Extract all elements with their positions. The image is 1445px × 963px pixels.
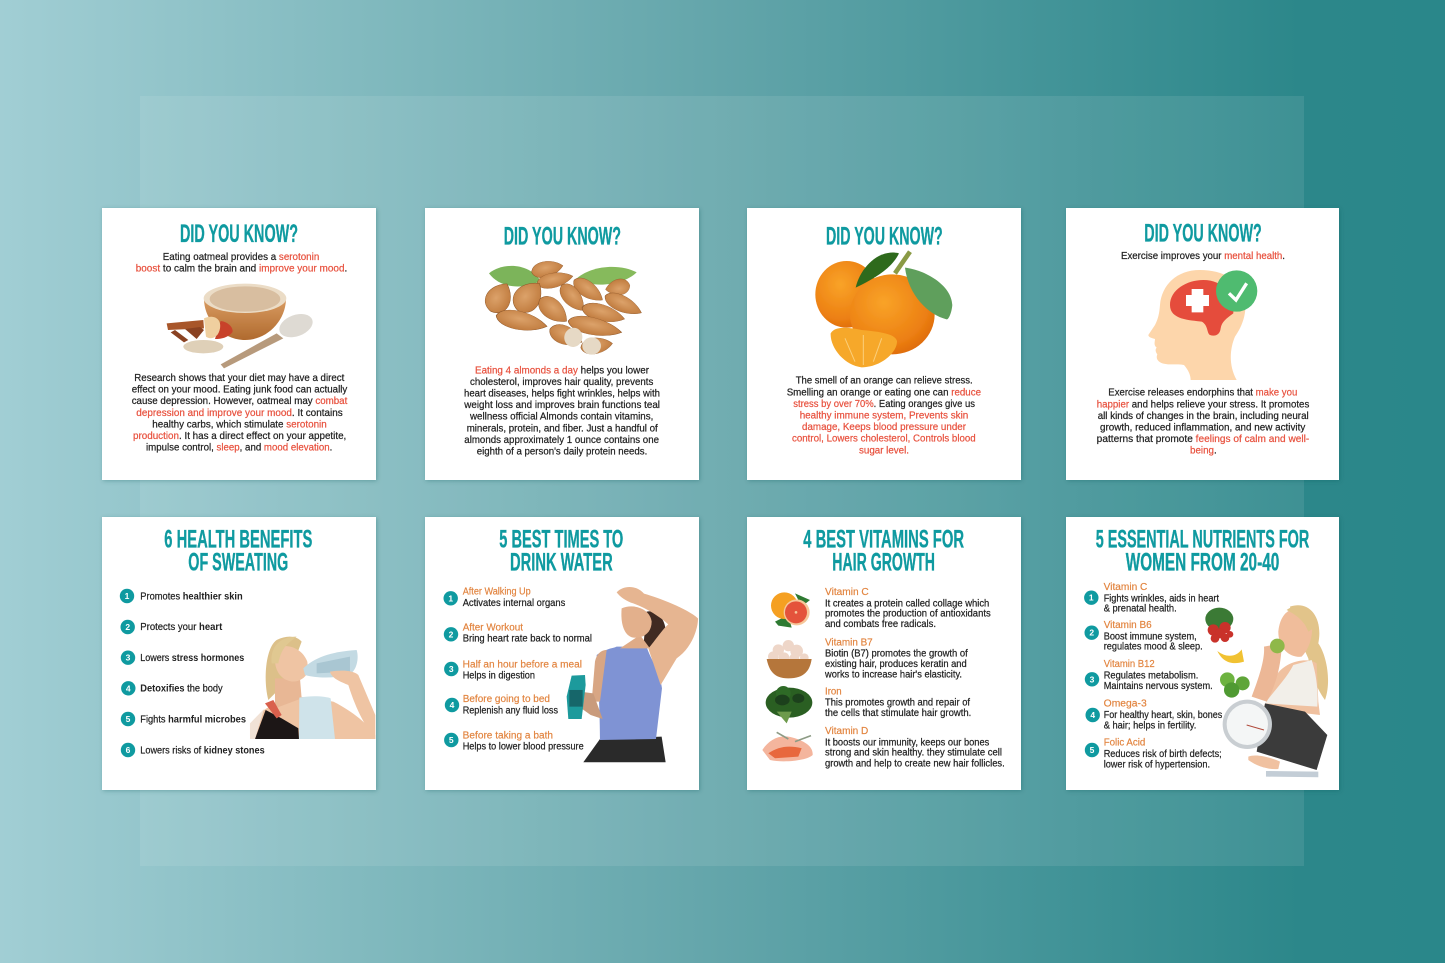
list item 4: Replenish any fluid loss (463, 705, 558, 716)
panel: essential nutrients for women (1066, 517, 1339, 790)
list item 1 (444, 587, 565, 609)
title: HAIR GROWTH (832, 548, 935, 576)
item: omega-3: 4 (1090, 710, 1095, 720)
body text: damage, Keeps blood pressure under (802, 422, 967, 433)
list item 3 (444, 659, 582, 682)
item: vitamin D: strong and skin healthy. they stimulate cell (825, 748, 1002, 759)
title: DID YOU KNOW? (180, 220, 298, 248)
item: vitamin C: and combats free radicals. (825, 619, 936, 630)
body text: The smell of an orange can relieve stress. (796, 376, 973, 387)
list item 3: 3 (449, 664, 454, 674)
item: omega-3 (1086, 699, 1222, 731)
item: vitamin B6: Vitamin B6 (1104, 620, 1152, 631)
item: vitamin D: growth and help to create new hair follicles. (825, 758, 1005, 769)
list item 5: Fights harmful microbes (140, 714, 246, 725)
intro text: Eating oatmeal provides a serotonin (163, 252, 319, 263)
list item 5: 5 (126, 714, 131, 724)
list item 3: Helps in digestion (463, 671, 535, 682)
title: OF SWEATING (188, 548, 288, 576)
list item 1 (120, 589, 243, 603)
item: vitamin C (825, 587, 991, 630)
body text: healthy immune system, Prevents skin (800, 410, 968, 422)
body text: eighth of a person's daily protein needs. (477, 446, 647, 458)
body text: wellness official Almonds contain vitamins, (469, 412, 653, 423)
title: DID YOU KNOW? (1144, 220, 1262, 248)
body text: cause depression. However, oatmeal may combat (132, 396, 348, 407)
list item 5: 5 (449, 735, 454, 745)
list item 2 (444, 622, 592, 645)
intro text: boost to calm the brain and improve your mood. (136, 264, 347, 275)
illustration: woman with water bottle (567, 587, 698, 762)
list item 2: After Workout (463, 622, 523, 633)
item: vitamin C: Vitamin C (1104, 582, 1147, 593)
item: vitamin B6: 2 (1089, 628, 1094, 638)
body text: almonds approximately 1 ounce contains one (464, 435, 659, 446)
title (803, 525, 964, 576)
item: iron: the cells that stimulate hair growth. (825, 708, 971, 719)
item: vitamin B6: Boost immune system, (1104, 631, 1197, 642)
title: 6 HEALTH BENEFITS (164, 525, 312, 553)
vitamin text (824, 587, 1005, 769)
icon: oranges (815, 252, 952, 367)
icon: oatmeal bowl (167, 284, 316, 368)
body text: all kinds of changes in the brain, including neural (1098, 411, 1309, 422)
body text: heart diseases, helps fight wrinkles, helps with (464, 388, 660, 400)
panel: almonds (425, 208, 699, 480)
list of times (444, 587, 592, 753)
body text: Exercise releases endorphins that make you (1108, 388, 1297, 399)
body text: control, Lowers cholesterol, Controls blood (792, 434, 976, 445)
item: vitamin B6: regulates mood & sleep. (1104, 642, 1203, 653)
list item 2: 2 (449, 629, 454, 639)
item: vitamin C: Fights wrinkles, aids in heart (1104, 593, 1219, 604)
list item 2: Bring heart rate back to normal (463, 634, 592, 645)
title (164, 525, 312, 576)
item: vitamin C: 1 (1089, 593, 1094, 603)
list item 4 (445, 694, 558, 716)
body text: cholesterol, improves hair quality, prevents (470, 377, 653, 388)
body text: growth, reduced inflammation, and new activity (1100, 422, 1305, 434)
list item 5 (444, 730, 584, 753)
icon: leafy greens (766, 686, 812, 723)
item: vitamin B7 (824, 637, 968, 681)
body text: sugar level. (859, 445, 909, 456)
item: vitamin C: promotes the production of antioxidants (825, 609, 991, 620)
item: vitamin C: Vitamin C (825, 587, 869, 598)
list item 1: Promotes healthier skin (140, 591, 243, 602)
list item 1: Activates internal organs (463, 598, 565, 609)
body text: patterns that promote feelings of calm and well- (1097, 434, 1309, 445)
title: DRINK WATER (510, 548, 613, 576)
list item 4: 4 (450, 700, 455, 710)
item: iron (825, 686, 971, 719)
body text (463, 365, 660, 458)
item: vitamin B6 (1084, 620, 1203, 653)
panel: benefits of sweating (102, 517, 376, 790)
body text (787, 376, 981, 456)
item: vitamin B7: Vitamin B7 (825, 637, 873, 648)
list item 5: Before taking a bath (463, 730, 553, 741)
title (1096, 525, 1309, 576)
panel: oatmeal (102, 208, 376, 480)
icon: grapefruit (771, 592, 810, 628)
item: vitamin B7: existing hair, produces keratin and (825, 659, 967, 670)
item: vitamin D: It boosts our immunity, keeps our bones (825, 737, 989, 748)
title (499, 525, 623, 576)
list item 2 (120, 620, 223, 634)
body text: depression and improve your mood. It contains (136, 408, 343, 419)
panel: best times to drink water (425, 517, 699, 790)
list item 6 (121, 743, 265, 757)
list item 1: After Walking Up (463, 587, 531, 598)
body text: stress by over 70%. Eating oranges give us (793, 399, 975, 410)
item: vitamin C: & prenatal health. (1104, 604, 1177, 615)
list item 5 (121, 712, 246, 726)
illustration: fruit and vegetables (1205, 608, 1250, 698)
list item 3: Half an hour before a meal (463, 659, 582, 670)
item: omega-3: For healthy heart, skin, bones (1104, 710, 1222, 721)
body text: effect on your mood. Eating junk food can actually (132, 385, 347, 396)
item: folic acid: Reduces risk of birth defects; (1104, 749, 1222, 760)
item: vitamin D: Vitamin D (825, 726, 868, 737)
icon: almonds (480, 258, 645, 356)
list item 3: 3 (126, 653, 131, 663)
title: 5 BEST TIMES TO (499, 525, 623, 553)
item: omega-3: & hair; helps in fertility. (1104, 720, 1196, 731)
item: vitamin C (1084, 582, 1219, 615)
title: DID YOU KNOW? (826, 222, 943, 250)
intro text (136, 252, 347, 275)
icon: salmon (762, 732, 813, 761)
list item 1: 1 (448, 593, 453, 603)
body text: production. It has a direct effect on your appetite, (133, 431, 346, 442)
panel: oranges (747, 208, 1021, 480)
item: vitamin B12: Regulates metabolism. (1104, 670, 1198, 681)
item: vitamin B12 (1085, 659, 1213, 692)
icon: head with brain and check mark (1148, 270, 1257, 380)
icon: basket of eggs (767, 640, 812, 678)
item: iron: This promotes growth and repair of (825, 698, 970, 709)
body text: Eating 4 almonds a day helps you lower (475, 365, 650, 376)
item: vitamin D (825, 726, 1005, 769)
item: vitamin B12: Maintains nervous system. (1104, 681, 1213, 692)
body text: being. (1190, 446, 1217, 457)
item: vitamin B7: Biotin (B7) promotes the growth of (825, 649, 968, 660)
body text: healthy carbs, which stimulate serotonin (152, 419, 327, 430)
list item 4: Before going to bed (463, 694, 550, 705)
list of nutrients (1084, 582, 1222, 770)
body text (132, 373, 348, 454)
panel: exercise and mental health (1066, 208, 1339, 480)
item: iron: Iron (825, 686, 842, 697)
list item 5: Helps to lower blood pressure (463, 742, 584, 753)
list of benefits (120, 589, 265, 757)
item: folic acid: lower risk of hypertension. (1104, 759, 1210, 770)
item: folic acid: 5 (1090, 745, 1095, 755)
body text: impulse control, sleep, and mood elevation. (146, 443, 332, 454)
item: vitamin C: It creates a protein called collage which (825, 598, 989, 609)
list item 4: 4 (126, 683, 131, 693)
item: vitamin B12: Vitamin B12 (1104, 659, 1155, 670)
item: vitamin B12: 3 (1090, 674, 1095, 684)
list item 2: 2 (125, 622, 130, 632)
list item 1: 1 (125, 591, 130, 601)
list item 2: Protects your heart (140, 622, 223, 633)
illustration: woman holding a scale (1223, 605, 1328, 777)
item: omega-3: Omega-3 (1104, 699, 1147, 710)
list item 3: Lowers stress hormones (140, 653, 245, 664)
list item 3 (121, 650, 245, 665)
item: folic acid: Folic Acid (1104, 738, 1145, 749)
title: 4 BEST VITAMINS FOR (803, 525, 964, 553)
item: folic acid (1085, 738, 1222, 770)
list item 4: Detoxifies the body (140, 684, 223, 694)
item: vitamin B7: works to increase hair's elasticity. (824, 670, 962, 681)
list item 6: 6 (126, 745, 131, 755)
body text: happier and helps relieve your stress. It promotes (1097, 399, 1309, 410)
title: DID YOU KNOW? (504, 222, 621, 250)
panel: vitamins for hair growth (747, 517, 1021, 790)
translucent backdrop panel (140, 96, 1304, 866)
title: WOMEN FROM 20-40 (1126, 548, 1279, 576)
body text: Research shows that your diet may have a direct (134, 373, 345, 384)
body text: weight loss and improves brain functions teal (463, 400, 660, 411)
illustration: woman drinking water (250, 637, 375, 739)
body text: minerals, protein, and fiber. Just a handful of (467, 423, 658, 434)
list item 6: Lowers risks of kidney stones (140, 745, 265, 756)
intro text: Exercise improves your mental health. (1121, 251, 1285, 262)
list item 4 (121, 681, 223, 696)
body text: Smelling an orange or eating one can reduce (787, 387, 981, 398)
body text (1097, 388, 1309, 457)
